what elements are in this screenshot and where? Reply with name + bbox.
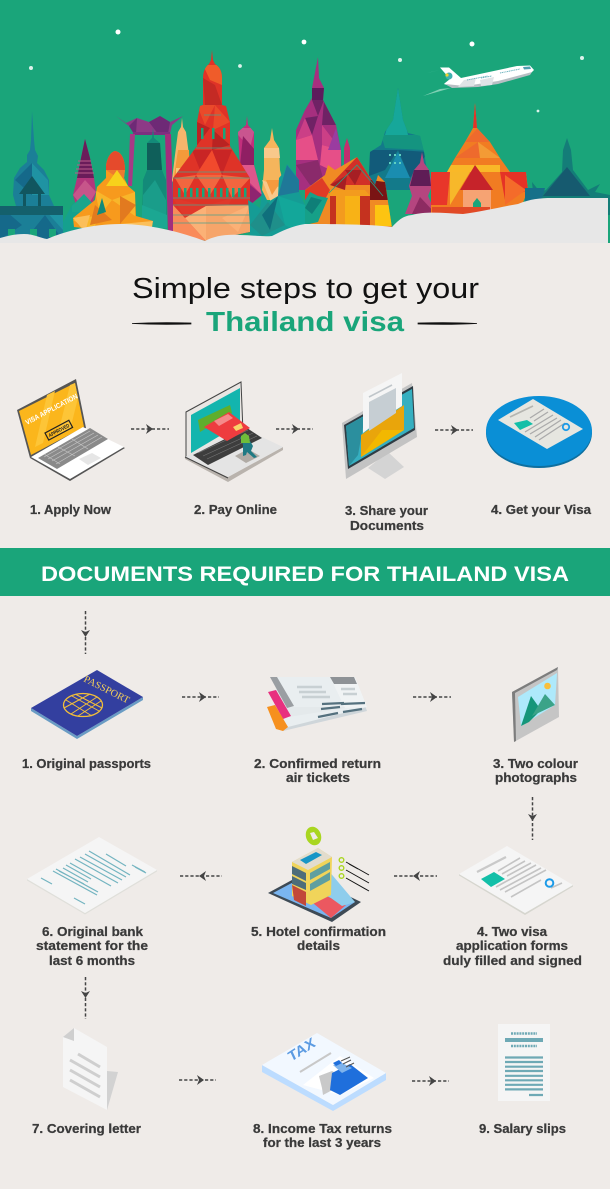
arrow xyxy=(179,1075,216,1085)
doc 6 label: last 6 months xyxy=(49,954,135,968)
doc 6 label: statement for the xyxy=(36,939,148,953)
plant and teal figure xyxy=(248,164,305,236)
doc 2 label: 2. Confirmed return xyxy=(254,757,381,771)
step 4 label: 4. Get your Visa xyxy=(491,503,592,517)
doc 8 icon: income tax return xyxy=(262,1033,386,1111)
doc 1 icon: passport: PASSPORT xyxy=(82,674,131,706)
doc 5 icon: hotel on tablet xyxy=(268,825,369,922)
small magenta spire xyxy=(344,138,350,170)
snow ground xyxy=(0,198,608,243)
doc 8 label xyxy=(253,1122,392,1150)
doc 6 label xyxy=(36,925,148,968)
step 3 label: Documents xyxy=(350,519,424,533)
step 2 label: 2. Pay Online xyxy=(194,503,277,517)
step 2 icon: laptop pay online xyxy=(185,382,283,482)
arrow xyxy=(394,871,437,881)
step 3 label xyxy=(345,504,428,533)
doc 5 label: 5. Hotel confirmation xyxy=(251,925,386,939)
Wat Arun central tower xyxy=(173,50,250,241)
step 3 icon: monitor with envelope xyxy=(342,373,417,479)
dark teal stupa under swing xyxy=(142,128,167,228)
left teal temple xyxy=(0,111,103,240)
giant swing xyxy=(116,116,183,232)
airplane xyxy=(423,66,534,96)
purple stupa xyxy=(296,55,342,190)
doc 6 label: 6. Original bank xyxy=(42,925,143,939)
doc 4 label: application forms xyxy=(456,939,568,953)
step 1 icon: laptop visa application: VISA APPLICATION xyxy=(24,392,79,427)
doc 2 icon: air tickets xyxy=(267,677,367,731)
doc 1 icon: passport xyxy=(31,670,143,739)
doc 5 label xyxy=(251,925,386,953)
tan spire xyxy=(262,128,285,205)
doc 6 icon: bank statement xyxy=(27,837,157,914)
arrow xyxy=(276,424,313,434)
doc 8 label: 8. Income Tax returns xyxy=(253,1122,392,1136)
arrow xyxy=(180,871,222,881)
step 4 icon: visa on blue disc xyxy=(486,396,592,468)
stars xyxy=(29,30,584,112)
doc 4 label xyxy=(443,925,582,968)
section band: DOCUMENTS REQUIRED FOR THAILAND VISA xyxy=(41,563,569,586)
orange temple left xyxy=(305,157,392,227)
step 1 icon: laptop visa application: APPROVED xyxy=(48,423,71,439)
arrow xyxy=(81,977,90,1019)
orange temple right xyxy=(431,103,528,214)
doc 3 label: 3. Two colour xyxy=(493,757,578,771)
doc 9 label: 9. Salary slips xyxy=(479,1122,566,1136)
doc 5 label: details xyxy=(297,939,340,953)
plant right xyxy=(305,192,328,225)
doc 4 label: duly filled and signed xyxy=(443,954,582,968)
small magenta pagoda xyxy=(72,139,96,212)
arrow xyxy=(435,425,473,435)
Buddha silhouette xyxy=(73,151,153,228)
doc 7 icon: covering letter xyxy=(63,1028,118,1110)
small spire left of tower xyxy=(172,118,190,195)
step 1 label: 1. Apply Now xyxy=(30,503,111,517)
title xyxy=(132,273,479,337)
doc 1 label: 1. Original passports xyxy=(22,757,151,771)
arrow xyxy=(182,692,219,702)
doc 7 label: 7. Covering letter xyxy=(32,1122,141,1136)
teal pagoda xyxy=(369,88,426,190)
arrow xyxy=(528,797,537,840)
magenta spire xyxy=(238,116,262,203)
step 1 icon: laptop visa application xyxy=(17,379,125,481)
doc 9 icon: salary slip xyxy=(498,1024,550,1101)
title: Thailand visa xyxy=(206,306,404,337)
doc 2 label xyxy=(254,757,381,785)
doc 8 label: for the last 3 years xyxy=(263,1136,381,1150)
arrow xyxy=(412,1076,449,1086)
dark teal temple right xyxy=(525,138,610,215)
doc 2 label: air tickets xyxy=(286,771,350,785)
arrow xyxy=(413,692,451,702)
doc 8 icon: income tax return: TAX xyxy=(285,1033,318,1065)
dark purple small stupa xyxy=(405,152,436,214)
doc 3 icon: photograph xyxy=(512,667,559,742)
arrow xyxy=(131,424,169,434)
step 3 label: 3. Share your xyxy=(345,504,428,518)
doc 3 label: photographs xyxy=(495,771,577,785)
doc 4 label: 4. Two visa xyxy=(477,925,548,939)
doc 4 icon: visa application form xyxy=(459,846,573,915)
doc 3 label xyxy=(493,757,578,785)
title: Simple steps to get your xyxy=(132,273,479,305)
section band xyxy=(0,548,610,596)
arrow xyxy=(81,611,90,654)
